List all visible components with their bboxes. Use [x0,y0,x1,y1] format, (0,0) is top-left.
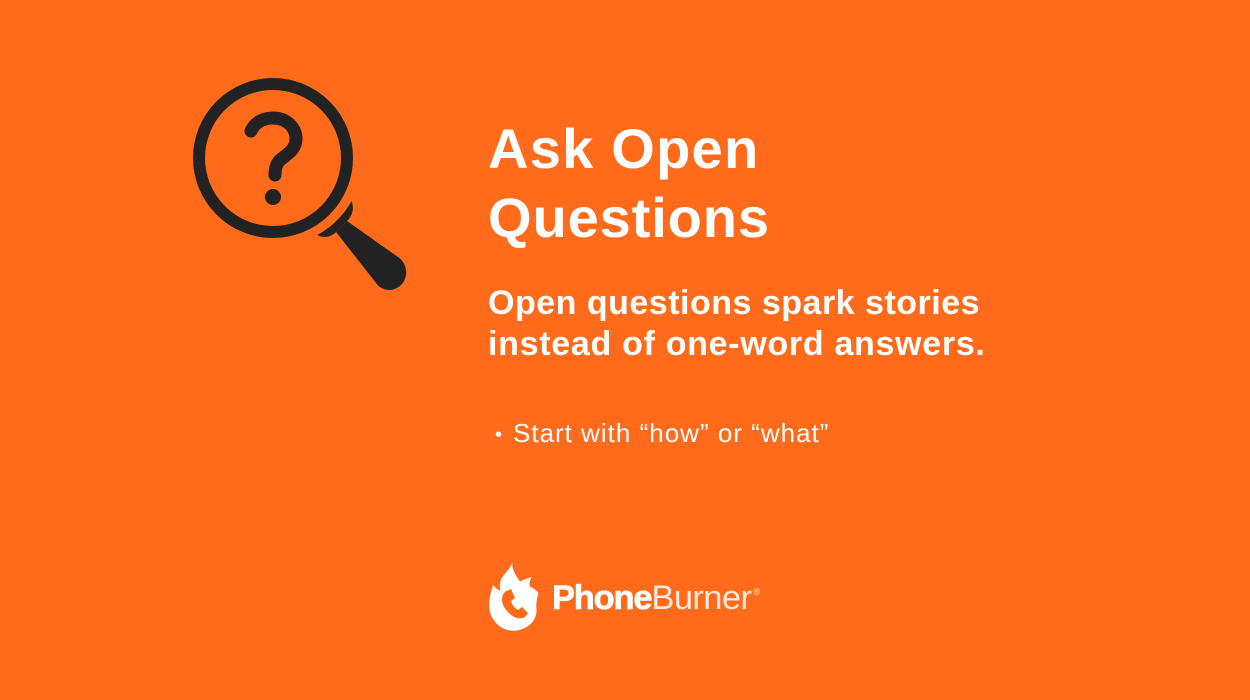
question mark [251,118,296,205]
subtitle: Open questions spark stories [488,284,980,322]
lens ring [199,84,347,232]
logo: PhoneBurner [489,562,760,631]
title [488,117,770,249]
handle [336,221,406,290]
subtitle [488,284,986,363]
icon: flame with phone [489,562,538,631]
bullet text: • [495,424,502,446]
subtitle: instead of one-word answers. [488,325,986,363]
wordmark: PhoneBurner® [552,579,760,617]
handle collar [317,201,353,237]
title: Ask Open [488,117,759,180]
bullet text: Start with “how” or “what” [513,418,829,448]
title: Questions [488,186,770,249]
